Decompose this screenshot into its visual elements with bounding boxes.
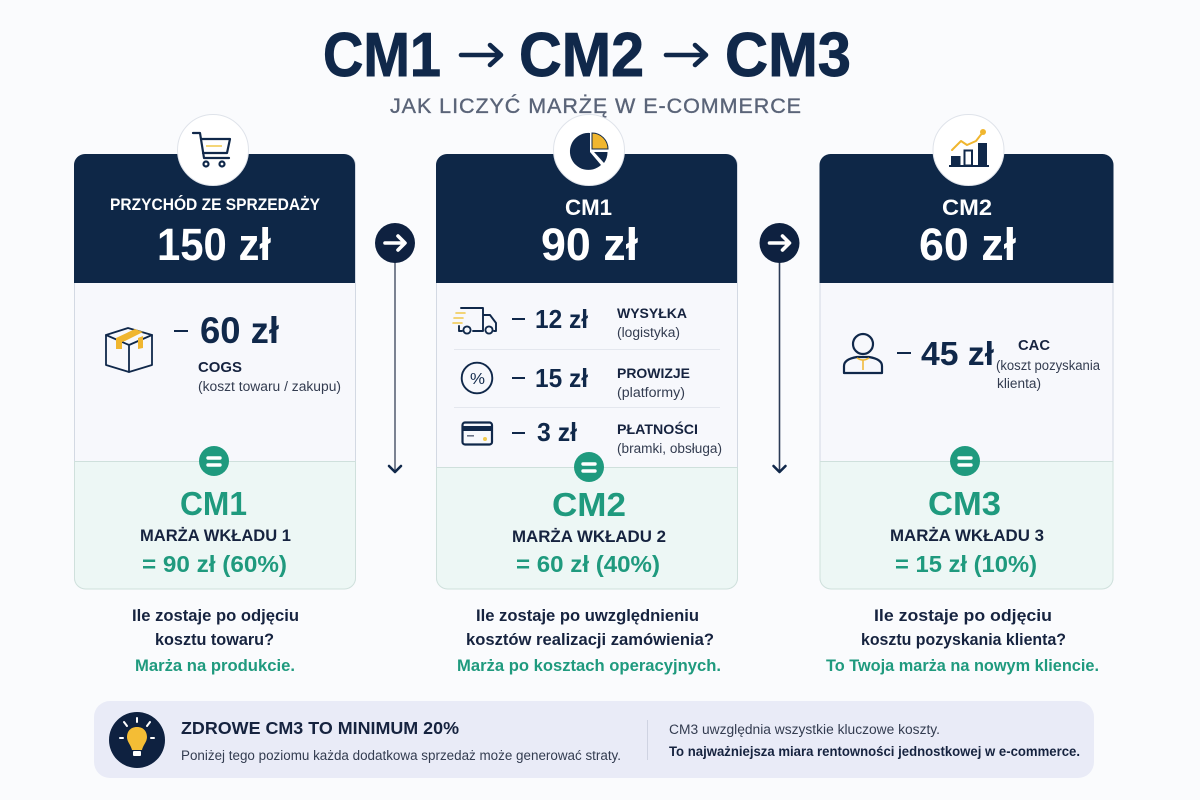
subtitle: JAK LICZYĆ MARŻĘ W E-COMMERCE: [390, 93, 801, 118]
result: CM1: MARŻA WKŁADU 1: [140, 527, 291, 545]
COGS amount: 60 zł: [200, 310, 279, 351]
arrow: flow 1 to 2: [375, 223, 415, 472]
caption 3: [826, 607, 1099, 675]
row: payments: 3 zł: [537, 417, 578, 447]
caption 2: Ile zostaje po uwzględnieniu: [476, 607, 699, 625]
icon: box: [106, 328, 152, 372]
result: CM2: = 60 zł (40%): [516, 551, 660, 577]
result: CM3: [820, 446, 1113, 589]
CAC label: [996, 338, 1100, 391]
title: CM1: [323, 21, 441, 90]
caption 3: kosztu pozyskania klienta?: [861, 631, 1066, 649]
caption 1: Marża na produkcie.: [135, 657, 295, 675]
caption 2: Marża po kosztach operacyjnych.: [457, 657, 721, 675]
result: CM2: [436, 452, 738, 589]
panel 3 header: [820, 154, 1114, 283]
icon: pie chart: [554, 114, 624, 186]
CAC amount: 45 zł: [921, 335, 994, 372]
callout description: Poniżej tego poziomu każda dodatkowa sprzedaż może generować straty.: [181, 748, 621, 763]
callout heading: ZDROWE CM3 TO MINIMUM 20%: [181, 718, 459, 738]
callout note: [669, 722, 1080, 759]
icon: shopping cart: [178, 114, 248, 186]
caption 1: [132, 607, 299, 675]
callout note: CM3 uwzględnia wszystkie kluczowe koszty.: [669, 722, 940, 737]
row: shipping: 12 zł: [535, 304, 589, 334]
panel: revenue to CM1: [74, 114, 356, 589]
icon: percent: %: [470, 371, 485, 388]
row: shipping: WYSYŁKA: [617, 305, 687, 321]
CAC label: CAC: [1018, 338, 1051, 354]
result: CM1: CM1: [180, 485, 247, 522]
title: CM2: [519, 21, 644, 90]
row: commissions: PROWIZJE: [617, 365, 690, 381]
result: CM2: MARŻA WKŁADU 2: [512, 528, 666, 546]
row: payments: PŁATNOŚCI: [617, 420, 698, 437]
icon: growth chart: [933, 114, 1004, 186]
row: commissions: [462, 363, 690, 400]
caption 1: Ile zostaje po odjęciu: [132, 607, 299, 625]
icon: light bulb: [109, 712, 165, 768]
title: CM3: [725, 21, 851, 90]
panel 1 header: PRZYCHÓD ZE SPRZEDAŻY: [110, 195, 320, 214]
panel 1 header: [74, 154, 355, 283]
caption 2: [457, 607, 721, 675]
callout note: To najważniejsza miara rentowności jednostkowej w e-commerce.: [669, 744, 1080, 759]
result: CM3: = 15 zł (10%): [895, 551, 1037, 577]
CAC label: (koszt pozyskania: [996, 358, 1100, 373]
row: payments: (bramki, obsługa): [617, 441, 722, 456]
result: CM3: MARŻA WKŁADU 3: [890, 527, 1044, 545]
CAC label: klienta): [997, 376, 1041, 391]
panel: CM2 to CM3: [820, 114, 1114, 589]
row: shipping: (logistyka): [617, 325, 680, 340]
row: commissions: (platformy): [617, 385, 685, 400]
icon: percent: [462, 363, 492, 393]
panel 3 header: 60 zł: [919, 219, 1016, 270]
COGS label: [198, 359, 341, 394]
panel: CM1 to CM2: [436, 114, 738, 589]
icon: customer: [844, 334, 882, 373]
caption 2: kosztów realizacji zamówienia?: [466, 631, 714, 649]
icon: truck: [453, 308, 496, 334]
COGS label: COGS: [198, 359, 242, 376]
COGS label: (koszt towaru / zakupu): [198, 379, 341, 394]
callout: minimum CM3: [94, 701, 1094, 778]
icon: credit card: [462, 422, 492, 444]
panel 1 header: 150 zł: [157, 219, 271, 270]
panel 2 header: CM1: [565, 195, 612, 220]
panel 2 header: [436, 154, 737, 283]
row: shipping: [453, 304, 687, 340]
caption 1: kosztu towaru?: [155, 631, 274, 649]
row: payments: [462, 417, 722, 456]
title: [323, 21, 851, 90]
row: commissions: 15 zł: [535, 363, 589, 393]
result: CM3: CM3: [928, 485, 1001, 522]
caption 3: To Twoja marża na nowym kliencie.: [826, 657, 1099, 675]
result: CM1: = 90 zł (60%): [142, 551, 287, 577]
caption 3: Ile zostaje po odjęciu: [874, 607, 1052, 625]
result: CM1: [74, 446, 356, 589]
result: CM2: CM2: [552, 486, 626, 523]
panel 2 header: 90 zł: [541, 219, 638, 270]
arrow: flow 2 to 3: [760, 223, 800, 472]
panel 3 header: CM2: [942, 195, 992, 220]
